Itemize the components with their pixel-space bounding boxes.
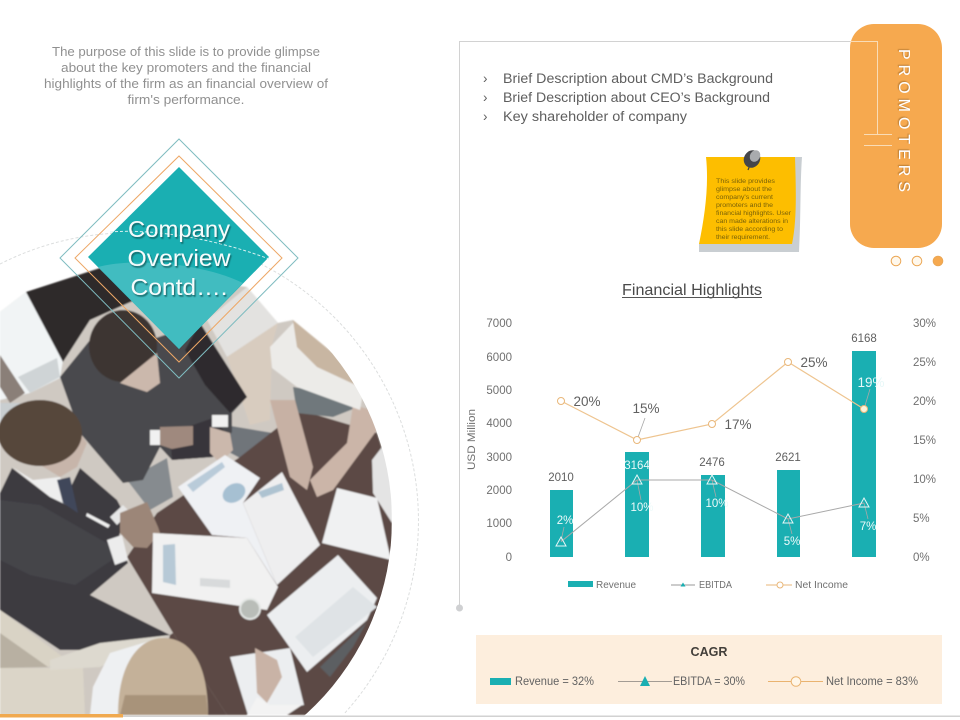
chart legend: Revenue: [596, 580, 636, 591]
right cloth: [372, 447, 392, 523]
combo chart: [466, 318, 936, 591]
ebitda line: [561, 480, 864, 542]
CAGR ebitda: EBITDA = 30%: [673, 676, 745, 688]
net income value labels: 19%: [857, 375, 885, 390]
blonde woman: [90, 642, 146, 714]
left axis labels: 3000: [486, 452, 512, 464]
man two suit: [0, 468, 170, 650]
chart legend: EBITDA: [699, 580, 732, 591]
intro text block: highlights of the firm as an financial overview of: [44, 76, 328, 91]
sticky text: promoters and the: [716, 202, 773, 209]
CAGR revenue: Revenue = 32%: [515, 676, 594, 688]
revenue bars: [550, 351, 876, 557]
bullet list: ›: [483, 71, 488, 86]
woman blouse: [270, 323, 363, 410]
bottom left chairs: [0, 610, 63, 667]
revenue value labels: 3164: [624, 460, 650, 472]
drinking glass: [240, 599, 260, 619]
right axis labels: 15%: [913, 435, 936, 447]
title text: Overview: [128, 245, 231, 271]
woman arms: [270, 400, 313, 490]
sticky text: [716, 178, 792, 241]
revenue value labels: 2476: [699, 457, 725, 469]
net income value labels: 15%: [632, 401, 660, 416]
CAGR net income: Net Income = 83%: [826, 676, 918, 688]
sticky text: this slide according to: [716, 226, 783, 233]
man one hair: [89, 310, 157, 382]
woman skirt: [293, 387, 358, 417]
sticky text: can made alterations in: [716, 218, 788, 225]
left axis labels: 4000: [486, 418, 512, 430]
sticky text: company's current: [716, 194, 773, 201]
sticky text: financial highlights. User: [716, 210, 792, 217]
man one grey legs: [127, 458, 173, 510]
footer rule: [0, 714, 960, 718]
title text: [128, 216, 231, 300]
bullet list: Brief Description about CEO’s Background: [503, 90, 770, 105]
bottom paper: [230, 648, 304, 715]
ebitda value labels: 5%: [784, 536, 800, 548]
intro text block: The purpose of this slide is to provide glimpse: [52, 44, 320, 59]
ebitda value labels: 10%: [705, 498, 729, 510]
revenue value labels: [548, 333, 877, 484]
chart legend: [568, 580, 848, 591]
intro text block: firm's performance.: [128, 92, 244, 107]
blinds: [207, 287, 278, 357]
net income line: [561, 362, 864, 440]
icon: push pin: [741, 147, 763, 171]
papers: [178, 455, 277, 585]
man two face: [43, 436, 87, 477]
sticky text: glimpse about the: [716, 186, 772, 193]
CAGR ebitda: [618, 676, 745, 688]
bullet list: Key shareholder of company: [503, 109, 687, 124]
promoters panel: [850, 24, 942, 248]
left axis labels: [486, 318, 512, 564]
promoters label: PROMOTERS: [895, 49, 912, 192]
window: [0, 292, 63, 400]
bullet list: [483, 71, 773, 124]
CAGR net income: [768, 676, 918, 688]
title text: Company: [128, 216, 231, 242]
laptop: [267, 555, 377, 672]
right axis labels: [913, 318, 936, 564]
CAGR panel: [476, 635, 942, 704]
bullet list: ›: [483, 109, 488, 124]
chart legend: Net Income: [795, 580, 848, 591]
man two cuffs and pen: [107, 535, 128, 565]
pagination dots: [891, 256, 943, 266]
bullet list: ›: [483, 90, 488, 105]
intro text block: about the key promoters and the financial: [61, 60, 311, 75]
chart heading: Financial Highlights: [622, 282, 762, 299]
title text: Contd….: [130, 274, 228, 300]
meeting photo in circle: [0, 268, 392, 715]
title diamond: [88, 167, 269, 349]
leader lines: [561, 389, 870, 541]
bullet list: Brief Description about CMD’s Background: [503, 71, 773, 86]
sticky text: This slide provides: [716, 178, 776, 185]
main diamond outlines: [60, 139, 298, 378]
intro text block: [44, 44, 328, 107]
sticky text: their requirement.: [716, 234, 770, 241]
net income value labels: 25%: [800, 355, 828, 370]
left axis labels: 7000: [486, 318, 512, 330]
axis title: USD Million: [466, 409, 478, 470]
right axis labels: 10%: [913, 474, 936, 486]
left axis labels: 0: [506, 552, 512, 564]
left axis labels: 1000: [486, 518, 512, 530]
notebook: [322, 488, 391, 560]
photo base: [0, 268, 392, 715]
CAGR heading: CAGR: [690, 644, 728, 659]
black chair: [26, 268, 135, 362]
man two tie: [57, 477, 78, 513]
revenue value labels: 2621: [775, 452, 801, 464]
ebitda value labels: 10%: [630, 502, 654, 514]
woman hair: [292, 320, 354, 385]
frame line: [456, 42, 850, 612]
right axis labels: 0%: [913, 552, 930, 564]
right axis labels: 5%: [913, 513, 930, 525]
left axis labels: 6000: [486, 352, 512, 364]
net income value labels: 17%: [724, 417, 752, 432]
sticky note: [699, 157, 802, 252]
man one cuffs and hands: [150, 430, 162, 445]
dashed arc: [0, 233, 418, 714]
man two shirt: [14, 468, 65, 504]
right axis labels: 25%: [913, 357, 936, 369]
man one suit: [60, 323, 247, 483]
ebitda markers: [556, 475, 869, 546]
left axis labels: 2000: [486, 485, 512, 497]
ebitda value labels: [557, 498, 876, 548]
man two hair: [0, 400, 82, 466]
table: [127, 410, 392, 715]
net income value labels: [573, 355, 885, 432]
left axis labels: 5000: [486, 385, 512, 397]
net income markers: [558, 358, 868, 444]
ebitda value labels: 7%: [860, 521, 876, 533]
floor: [228, 326, 276, 424]
man two hands: [120, 502, 160, 548]
net income value labels: 20%: [573, 394, 601, 409]
revenue value labels: 6168: [851, 333, 877, 345]
revenue value labels: 2010: [548, 472, 574, 484]
ebitda value labels: 2%: [557, 515, 573, 527]
right axis labels: 30%: [913, 318, 936, 330]
right axis labels: 20%: [913, 396, 936, 408]
